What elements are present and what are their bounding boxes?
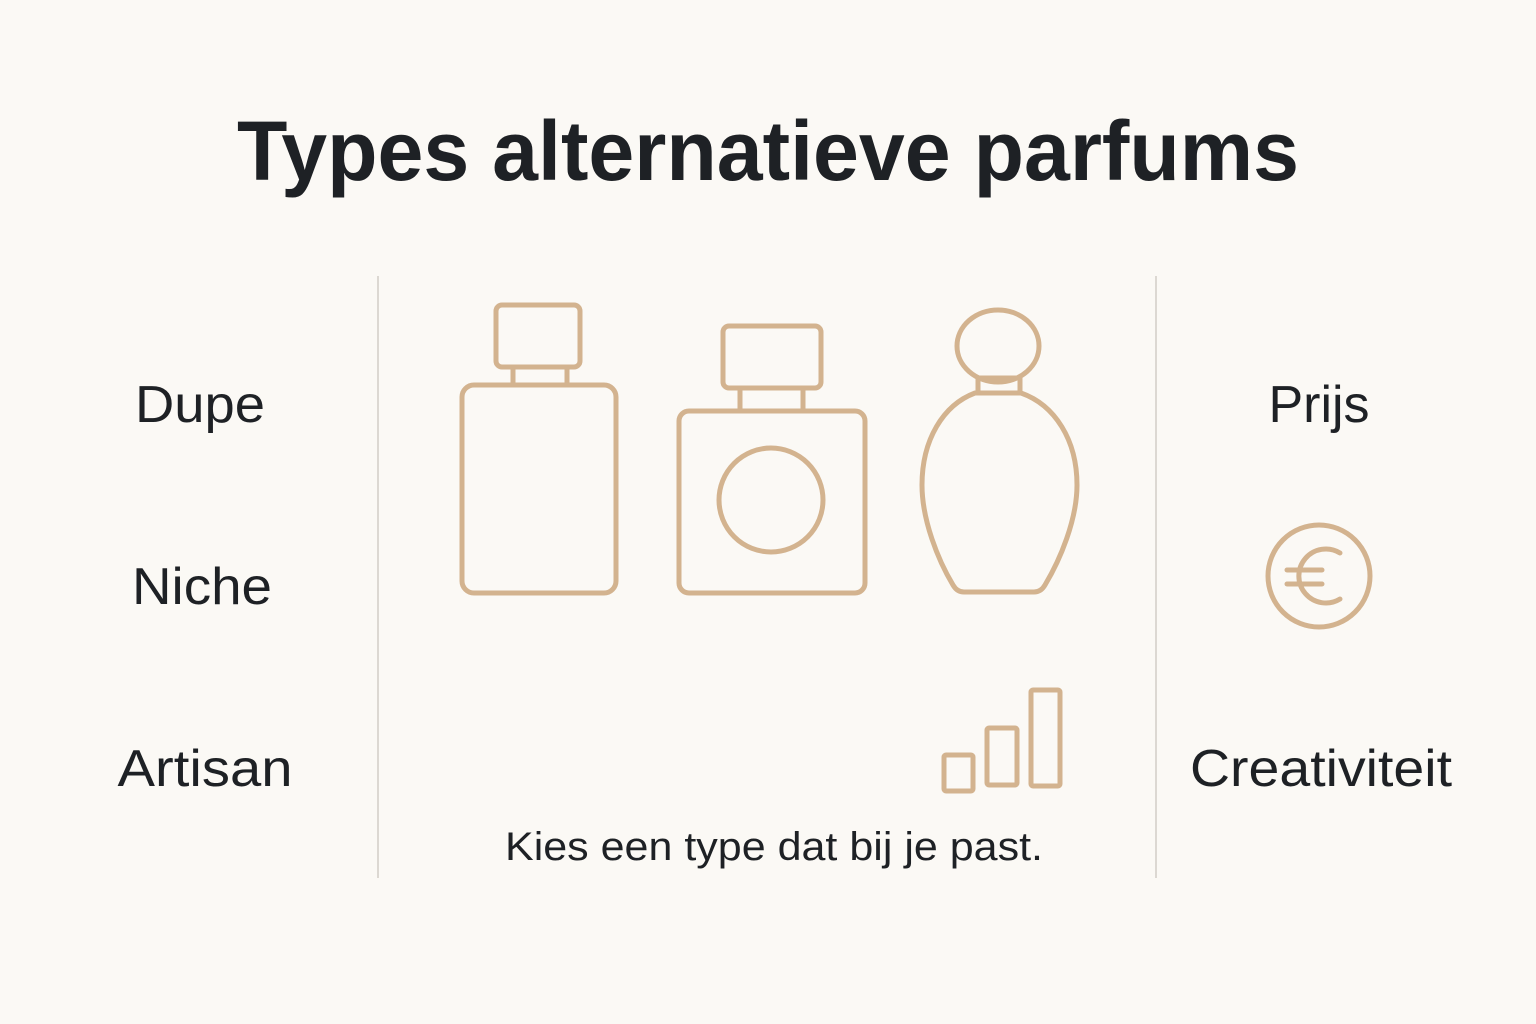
left labels <box>118 376 292 798</box>
icon: rectangular bottle <box>462 305 616 593</box>
right labels <box>1190 376 1453 798</box>
icon: bar chart <box>944 690 1060 791</box>
label: Dupe: Dupe <box>135 376 265 434</box>
caption: Kies een type dat bij je past. <box>505 825 1043 869</box>
label: Niche: Niche <box>132 558 272 616</box>
icon: euro coin <box>1268 525 1370 627</box>
label: Artisan: Artisan <box>118 740 292 798</box>
label: Prijs: Prijs <box>1268 376 1370 434</box>
icon: square bottle with circle <box>679 326 865 593</box>
icon: round bottle <box>922 310 1077 592</box>
label: Creativiteit: Creativiteit <box>1190 740 1453 798</box>
title: Types alternatieve parfums <box>237 104 1299 198</box>
